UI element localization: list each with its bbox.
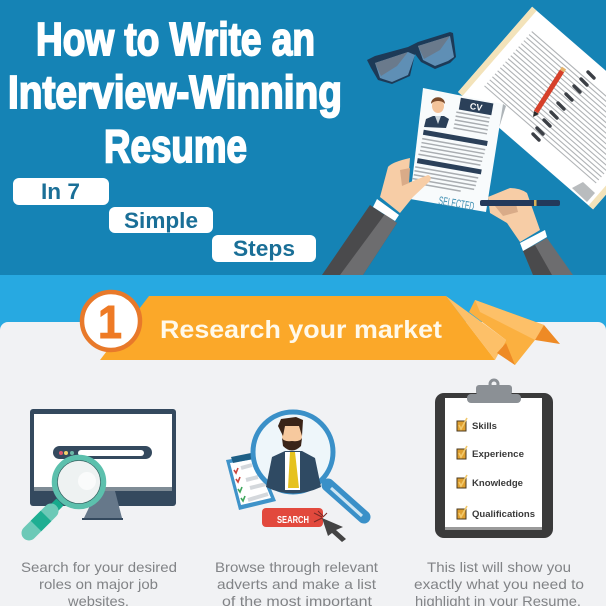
icon: clipboard checklist	[435, 380, 553, 538]
text: browse adverts: adverts and make a list	[217, 576, 376, 592]
checklist item: qualifications	[457, 506, 535, 519]
illustration: right hand, pen and sleeve	[480, 188, 573, 275]
stamp text: SELECTED	[437, 194, 476, 214]
checklist	[226, 453, 276, 510]
light content panel	[0, 322, 606, 606]
subtitle pills: Simple	[124, 208, 198, 233]
checklist item: qualifications: Qualifications	[472, 509, 535, 519]
icon: monitor with magnifier	[29, 409, 176, 533]
checklist item: skills: Skills	[472, 421, 497, 431]
checklist item: knowledge: Knowledge	[472, 478, 523, 488]
text: browse adverts	[215, 559, 378, 606]
icon: candidate magnifier, checklist and search button	[226, 412, 364, 542]
checklist item: experience	[457, 446, 524, 459]
step banner	[100, 296, 560, 365]
title: Interview-Winning	[8, 66, 342, 118]
header background	[0, 0, 606, 276]
title: How to Write an	[36, 13, 315, 65]
illustration: left hand and sleeve	[322, 158, 431, 275]
icon: cursor	[322, 518, 346, 542]
CV label: CV	[469, 101, 483, 113]
checklist item: experience: Experience	[472, 449, 524, 459]
text: list guidance: exactly what you need to	[414, 576, 584, 592]
text: search for roles: roles on major job	[39, 576, 158, 592]
checklist item: knowledge	[457, 475, 523, 488]
subtitle pills: Steps	[233, 236, 295, 261]
illustration: open document with pencil	[458, 7, 606, 209]
icon: glasses	[367, 32, 456, 84]
title	[8, 13, 342, 172]
text: browse adverts: Browse through relevant	[215, 559, 378, 575]
checklist item: skills	[457, 418, 497, 431]
step number badge	[82, 292, 140, 350]
light blue band	[0, 275, 606, 335]
step number badge: 1	[98, 296, 122, 348]
search button: SEARCH	[277, 514, 309, 526]
icon: portrait	[424, 97, 449, 128]
portrait	[266, 417, 321, 494]
text: list guidance	[414, 559, 584, 606]
subtitle pills: In 7	[41, 179, 80, 204]
text: search for roles	[21, 559, 177, 606]
step heading: Research your market	[160, 316, 443, 344]
title: Resume	[104, 120, 247, 172]
text: search for roles: Search for your desired	[21, 559, 177, 575]
subtitle pills	[13, 178, 316, 262]
text: list guidance: This list will show you	[427, 559, 571, 575]
illustration: CV sheet	[408, 88, 506, 214]
